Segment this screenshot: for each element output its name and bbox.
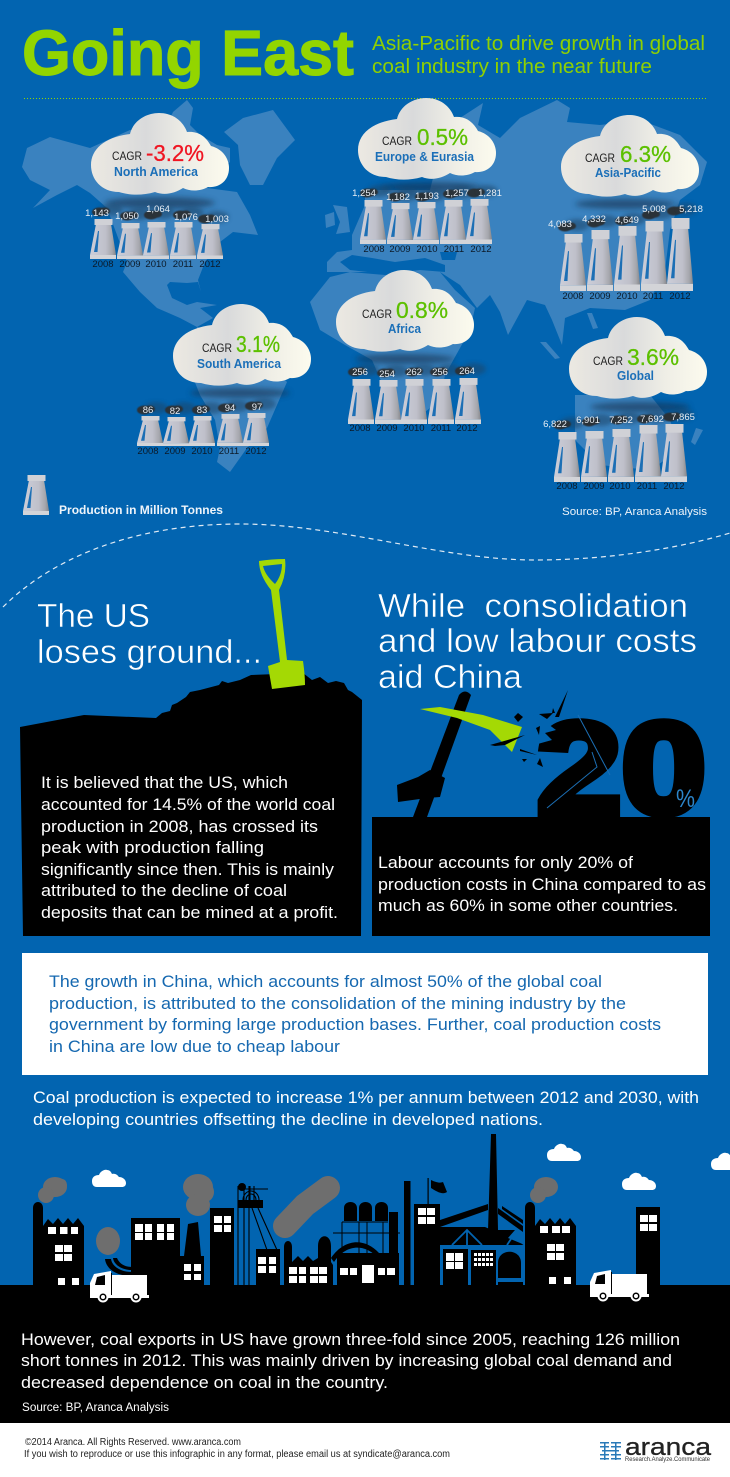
text: coal production forecast [33,1089,699,1129]
icon: small clouds [92,1144,730,1190]
panel: Global: 3.6% [627,344,679,370]
panel: North America: North America [114,165,199,179]
smoke plumes [38,1174,558,1255]
panel: South America: 2011 [219,446,239,457]
panel: China growth [22,953,708,1075]
panel: Africa: 2011 [431,423,451,434]
panel: Asia-Pacific: 4,083 [548,219,572,230]
text: US decline: It is believed that the US, which [41,774,288,792]
panel: Global: 6,822 [543,419,567,430]
legend [23,475,223,517]
logo: aranca: aranca [625,1434,712,1461]
panel: Asia-Pacific: 4,649 [615,215,639,226]
panel: coal mound [20,673,362,936]
panel: Africa: 0.8% [396,297,448,323]
panel: Africa: 264 [459,366,475,377]
subtitle: coal industry in the near future [372,56,652,78]
heading: While consolidation [378,587,697,695]
panel: Africa: Africa [388,322,422,336]
panel: Global: 2010 [609,481,631,492]
text: coal exports: short tonnes in 2012. This was mainly driven by increasing global coal demand and [21,1352,672,1370]
panel: Asia-Pacific: 4,332 [582,214,606,225]
heading: While consolidation: and low labour costs [378,622,697,659]
panel: North America: 1,050 [115,211,139,222]
legend: Production in Million Tonnes [59,505,223,517]
icon: pickaxe [397,690,568,817]
panel: North America: 2010 [145,259,167,270]
text: US decline: attributed to the decline of coal [41,882,287,900]
text: US decline: production in 2008, has crossed its [41,818,318,836]
source: bottom: Source: BP, Aranca Analysis [22,1402,169,1414]
heading: The US loses ground: loses ground... [37,633,262,670]
icon: trucks [90,1270,649,1302]
panel: Africa: 256 [352,367,368,378]
panel: South America: CAGR [202,341,232,355]
panel: China labour [372,817,710,936]
panel: China growth: in China are low due to cheap labour [49,1038,341,1056]
footer: ©2014 Aranca. All Rights Reserved. www.aranca.com [25,1437,241,1448]
panel: Asia-Pacific: 6.3% [620,141,671,167]
panel: North America: -3.2% [146,140,204,166]
panel: South America: 83 [197,405,207,416]
panel: Europe and Eurasia: 2010 [416,244,438,255]
panel: Asia-Pacific: 2009 [589,291,611,302]
panel: Asia-Pacific: CAGR [585,151,615,165]
panel: South America: 82 [170,406,180,417]
panel: Global: 2012 [663,481,685,492]
heading: The US loses ground: The US [37,597,150,634]
panel: Africa: 2012 [456,423,478,434]
panel: North America: 1,003 [205,214,229,225]
panel: North America: 1,064 [146,204,170,215]
panel: Global: Global [617,369,654,383]
source: map: Source: BP, Aranca Analysis [562,506,708,518]
panel: Asia-Pacific: 5,008 [642,204,666,215]
panel: China growth: production, is attributed to the consolidation of the mining industry by the [49,995,626,1013]
world map [22,100,707,472]
panel: Global: 7,692 [640,414,664,425]
panel: Europe and Eurasia: 1,182 [386,192,410,203]
subtitle: Asia-Pacific to drive growth in global [372,33,705,55]
panel: China growth: government by forming large production bases. Further, coal production costs [49,1016,661,1034]
panel: China labour: Labour accounts for only 20% of [378,854,633,872]
panel: Europe and Eurasia: 2009 [389,244,411,255]
panel: South America: 86 [143,405,153,416]
text: US decline: significantly since then. This is mainly [41,861,335,879]
subtitle [372,33,705,78]
logo: aranca [600,1434,712,1463]
panel: Asia-Pacific [548,115,703,302]
footer [0,1423,730,1477]
city skyline [0,1134,730,1423]
panel: Global [543,317,707,492]
icon: shovel [259,559,305,689]
panel: Europe and Eurasia: CAGR [382,134,412,148]
panel: North America: 2011 [173,259,193,270]
panel: Asia-Pacific: 2010 [616,291,638,302]
panel: Europe and Eurasia: Europe & Eurasia [375,150,475,164]
panel: North America [85,113,229,270]
panel: Africa: CAGR [362,307,392,321]
dense window grid [474,1253,493,1266]
panel: Global: 7,252 [609,415,633,426]
panel: Global: 6,901 [576,415,600,426]
panel: Europe and Eurasia: 2008 [363,244,385,255]
panel: North America: CAGR [112,149,142,163]
big number 20: 20 [537,695,706,841]
panel: South America: 2008 [137,446,159,457]
text: coal production forecast: developing countries offsetting the decline in developed nations. [33,1111,543,1129]
logo: aranca: Research.Analyze.Communicate [625,1456,710,1463]
text: coal exports: However, coal exports in US have grown three-fold since 2005, reaching 126 million [21,1331,680,1349]
panel: South America: 2010 [191,446,213,457]
big number 20: % [676,785,695,813]
panel: Global: 2011 [637,481,657,492]
panel: South America: 97 [252,402,262,413]
text: US decline: deposits that can be mined at a profit. [41,904,338,922]
text: coal production forecast: Coal production is expected to increase 1% per annum between 2012 and 2030, with [33,1089,699,1107]
text: coal exports: decreased dependence on coal in the country. [21,1374,388,1392]
panel: Europe and Eurasia: 1,257 [445,188,469,199]
title: Going East [22,17,354,89]
dashed curve [3,524,730,607]
panel: Africa: 262 [406,367,422,378]
panel: Global: 2008 [556,481,578,492]
panel: Africa: 2009 [376,423,398,434]
panel: Asia-Pacific: 5,218 [679,204,703,215]
text: coal exports [21,1331,680,1392]
panel: China labour: much as 60% in some other countries. [378,897,678,915]
panel: Africa [336,270,486,434]
panel: Global: 7,865 [671,412,695,423]
panel: North America: 2012 [199,259,221,270]
panel: Africa: 254 [379,369,395,380]
panel: Europe and Eurasia: 2012 [470,244,492,255]
panel: South America: 3.1% [236,331,280,357]
text: US decline: peak with production falling [41,839,264,857]
footer: If you wish to reproduce or use this infographic in any format, please email us at syndicate@aranca.com [24,1449,450,1460]
panel: Europe and Eurasia: 2011 [444,244,464,255]
panel: Asia-Pacific: 2011 [643,291,663,302]
building windows [48,1208,657,1285]
panel: China growth: The growth in China, which accounts for almost 50% of the global coal [49,973,602,991]
panel: North America: 2008 [92,259,114,270]
panel: China labour: production costs in China compared to as [378,876,706,894]
panel: North America: 1,076 [174,212,198,223]
panel: South America: 2009 [164,446,186,457]
panel: Asia-Pacific: 2012 [669,291,691,302]
heading: While consolidation: While consolidation [378,587,688,624]
panel: Europe and Eurasia: 1,281 [478,188,502,199]
panel: South America: South America [197,357,282,371]
panel: South America: 2012 [245,446,267,457]
heading: The US loses ground [37,597,262,670]
panel: North America: 2009 [119,259,141,270]
text: US decline: accounted for 14.5% of the world coal [41,796,335,814]
panel: Asia-Pacific: Asia-Pacific [595,166,661,180]
panel: South America [137,304,311,457]
panel: Europe and Eurasia [352,98,502,255]
panel: Global: 2009 [583,481,605,492]
panel: Global: CAGR [593,354,623,368]
panel: Europe and Eurasia: 0.5% [417,124,468,150]
panel: Europe and Eurasia: 1,254 [352,188,376,199]
panel: Africa: 2008 [349,423,371,434]
panel: Africa: 2010 [403,423,425,434]
panel: Africa: 256 [432,367,448,378]
panel: North America: 1,143 [85,208,109,219]
panel: Asia-Pacific: 2008 [562,291,584,302]
panel: South America: 94 [225,403,235,414]
text: US decline [41,774,338,922]
heading: While consolidation: aid China [378,658,523,695]
panel: Europe and Eurasia: 1,193 [415,191,439,202]
